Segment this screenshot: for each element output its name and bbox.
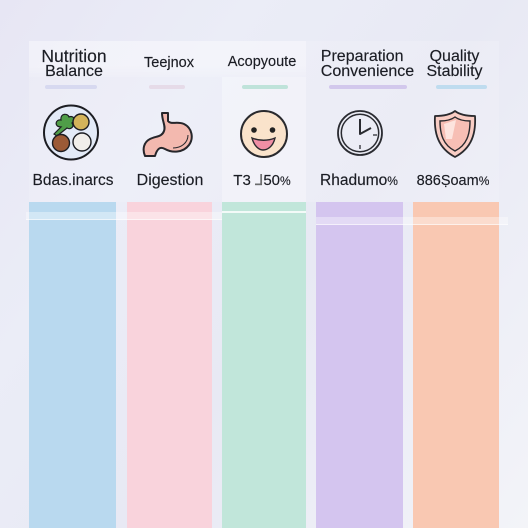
- green column panel: [222, 77, 306, 202]
- heading: Preparation Convenience: Preparation: [321, 48, 404, 65]
- icon: food plate: [43, 104, 99, 160]
- accent rule: green: [242, 85, 288, 89]
- header panel: [29, 41, 499, 202]
- icon: clock: [337, 110, 383, 156]
- bar: purple: [316, 202, 403, 528]
- label: 886Soam%: 886Ṣoam%: [417, 173, 489, 189]
- heading: Nutrition Balance: Balance: [45, 63, 103, 80]
- icon: stomach: [142, 112, 193, 157]
- highlight band: left: [26, 212, 222, 220]
- heading: Preparation Convenience: [321, 48, 414, 80]
- label: Digestion: Digestion: [137, 172, 203, 189]
- accent rule: pink: [149, 85, 185, 89]
- heading: Preparation Convenience: Convenience: [321, 63, 414, 80]
- heading: Acopyoute: Acopyoute: [228, 54, 296, 70]
- highlight band: right: [316, 217, 508, 225]
- label: Rhadumo%: Rhadumo%: [320, 172, 398, 189]
- accent rule: blue-grey: [45, 85, 97, 89]
- heading: Teejnox: Teejnox: [144, 55, 194, 71]
- icon: shield: [434, 110, 476, 158]
- bar: blue: [29, 202, 116, 528]
- label: T3 150%: T3 ⅃50%: [233, 172, 291, 189]
- heading: Quality Stability: Stability: [426, 63, 483, 80]
- bar: green: [222, 202, 306, 528]
- highlight line: green bar: [222, 211, 306, 212]
- header strip: [29, 41, 306, 77]
- bar: pink: [127, 202, 212, 528]
- heading: Quality Stability: [426, 48, 483, 80]
- label: Bdas.inarcs: Bdas.inarcs: [33, 172, 113, 189]
- accent rule: purple: [329, 85, 407, 89]
- icon: smiling face: [240, 110, 288, 158]
- heading: Nutrition Balance: Nutrition: [41, 46, 107, 66]
- bar: orange: [413, 202, 499, 528]
- accent rule: light blue: [436, 85, 487, 89]
- heading: Nutrition Balance: [41, 46, 107, 80]
- heading: Quality Stability: Quality: [430, 48, 479, 65]
